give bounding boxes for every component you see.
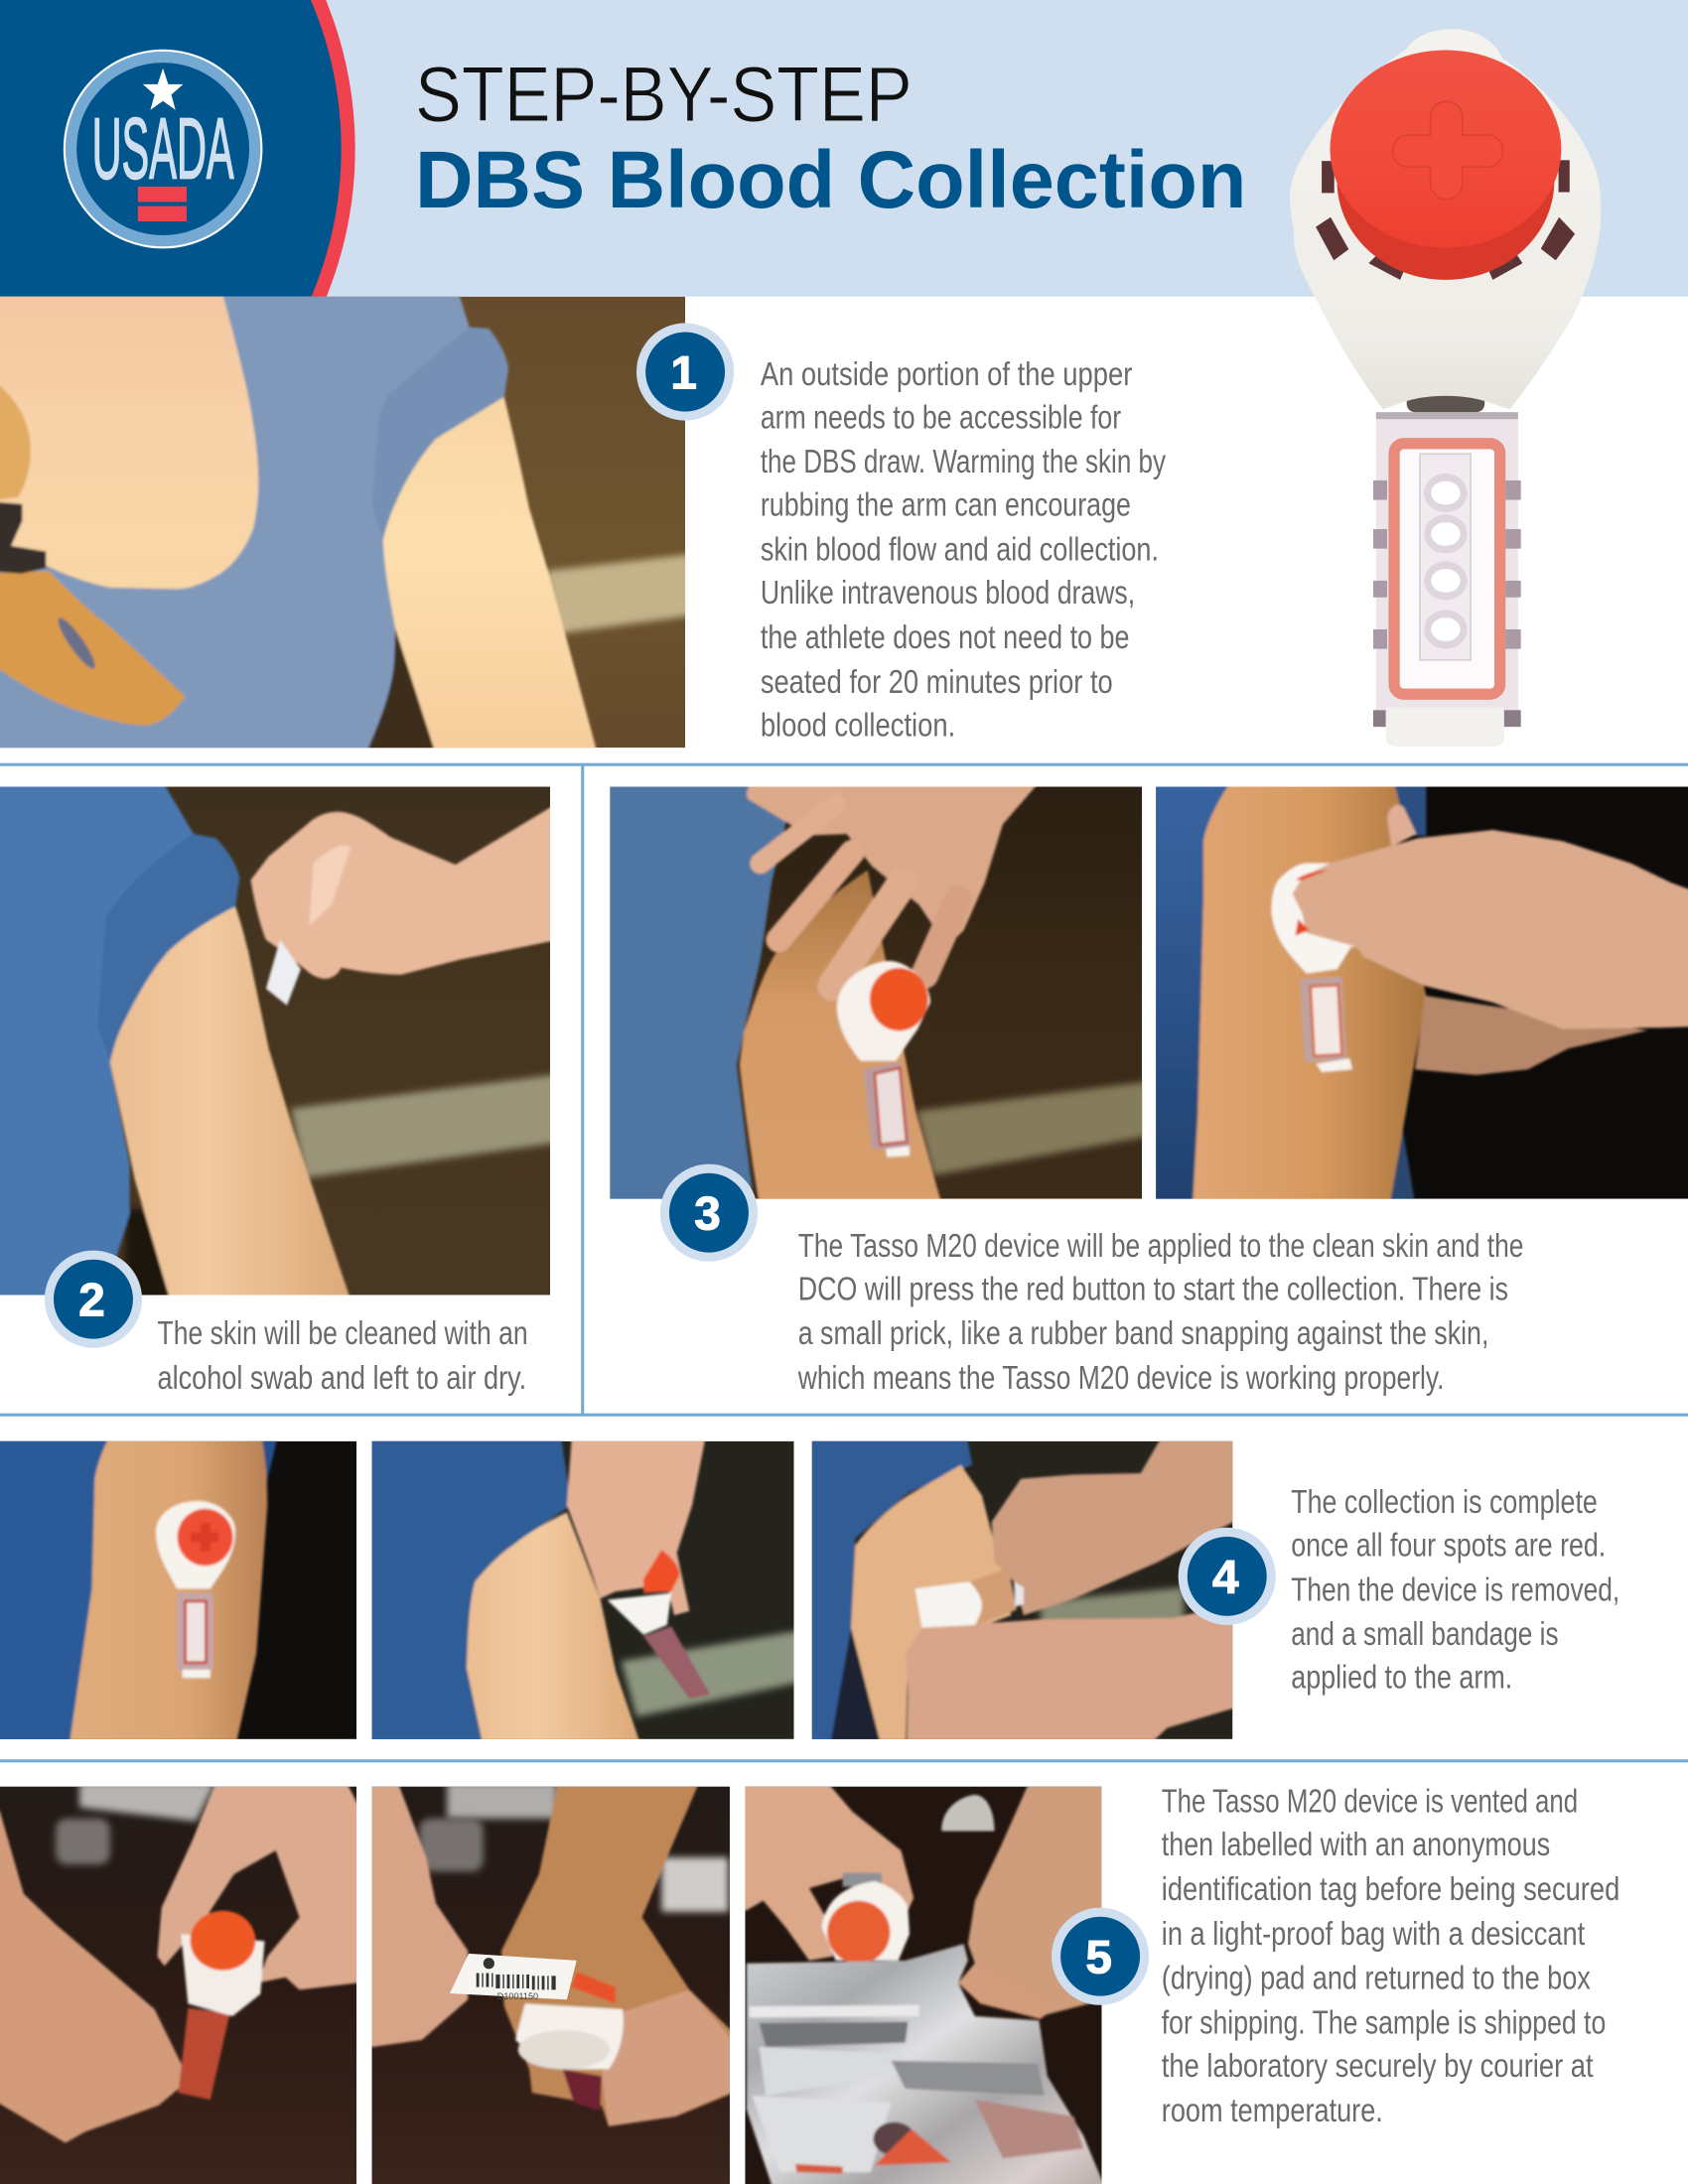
text: step 4: [1291, 1483, 1619, 1696]
photo: removing device: [371, 1441, 794, 1739]
photo: venting device: [0, 1787, 357, 2184]
title: DBS Blood Collection: [415, 135, 1246, 225]
badge 4: [1179, 1528, 1276, 1625]
text: step 5: then labelled with an anonymous: [1162, 1826, 1550, 1862]
badge 1: [636, 323, 734, 421]
text: step 5: [1162, 1783, 1619, 2128]
text: step 3: a small prick, like a rubber band snapping against the skin,: [798, 1314, 1488, 1351]
text: step 1: An outside portion of the upper: [761, 355, 1132, 392]
text: step 3: [797, 1227, 1523, 1396]
text: step 4: and a small bandage is: [1291, 1615, 1559, 1652]
text: step 5: (drying) pad and returned to the box: [1162, 1960, 1591, 1996]
text: step 2: The skin will be cleaned with an: [157, 1314, 528, 1351]
badge 2: 2: [78, 1274, 105, 1326]
title: [415, 51, 1246, 225]
text: step 5: in a light-proof bag with a desiccant: [1162, 1915, 1585, 1952]
barcode label: [450, 1954, 577, 2001]
photo: device applied to arm: [610, 786, 1142, 1199]
text: step 1: arm needs to be accessible for: [761, 398, 1121, 435]
text: step 1: blood collection.: [761, 706, 955, 743]
text: step 5: The Tasso M20 device is vented and: [1162, 1783, 1578, 1820]
badge 3: 3: [694, 1188, 721, 1241]
text: step 1: Unlike intravenous blood draws,: [761, 574, 1135, 611]
text: step 3: DCO will press the red button to start the collection. There is: [798, 1270, 1508, 1306]
device cartridge: [1373, 412, 1521, 747]
text: step 1: skin blood flow and aid collection.: [761, 531, 1159, 568]
text: step 2: [157, 1314, 528, 1396]
photo: applying barcode label: [371, 1787, 730, 2184]
device body: [1290, 29, 1601, 409]
text: step 1: [761, 355, 1166, 743]
text: step 5: the laboratory securely by courier at: [1162, 2047, 1594, 2084]
text: step 5: room temperature.: [1162, 2092, 1383, 2128]
device red button: [1331, 50, 1561, 280]
photo: sealing in foil bag: [745, 1787, 1102, 2184]
photo: applying bandage: [812, 1441, 1233, 1739]
text: step 4: applied to the arm.: [1291, 1659, 1512, 1696]
header band: [0, 0, 1688, 297]
text: step 3: which means the Tasso M20 device is working properly.: [797, 1359, 1445, 1396]
divider lines: [0, 763, 1688, 1762]
logo: USADA: [64, 50, 262, 248]
header logo panel: [0, 0, 355, 297]
photo: upper arm and shirt: [0, 296, 685, 749]
badge 5: 5: [1085, 1932, 1112, 1984]
text: step 1: the athlete does not need to be: [761, 618, 1130, 655]
logo: USADA: USADA: [92, 101, 234, 198]
text: step 1: rubbing the arm can encourage: [761, 486, 1131, 523]
badge 2: [45, 1251, 142, 1348]
badge 4: 4: [1212, 1552, 1239, 1604]
device: Tasso M20: [1290, 29, 1601, 747]
photo: pressing red button: [1156, 786, 1688, 1199]
badge 3: [660, 1164, 758, 1262]
barcode label: D1001150: [497, 1991, 538, 2001]
text: step 2: alcohol swab and left to air dry.: [157, 1359, 526, 1396]
text: step 4: The collection is complete: [1291, 1483, 1598, 1520]
title: STEP-BY-STEP: [415, 51, 913, 138]
text: step 1: the DBS draw. Warming the skin by: [761, 443, 1166, 479]
badge 1: 1: [670, 346, 697, 399]
photo: swab over arm: [0, 786, 550, 1295]
photo: device on arm: [0, 1441, 356, 1739]
badge 5: [1052, 1908, 1149, 2005]
text: step 3: The Tasso M20 device will be applied to the clean skin and the: [798, 1227, 1523, 1264]
text: step 4: once all four spots are red.: [1291, 1526, 1606, 1563]
text: step 1: seated for 20 minutes prior to: [761, 663, 1113, 700]
